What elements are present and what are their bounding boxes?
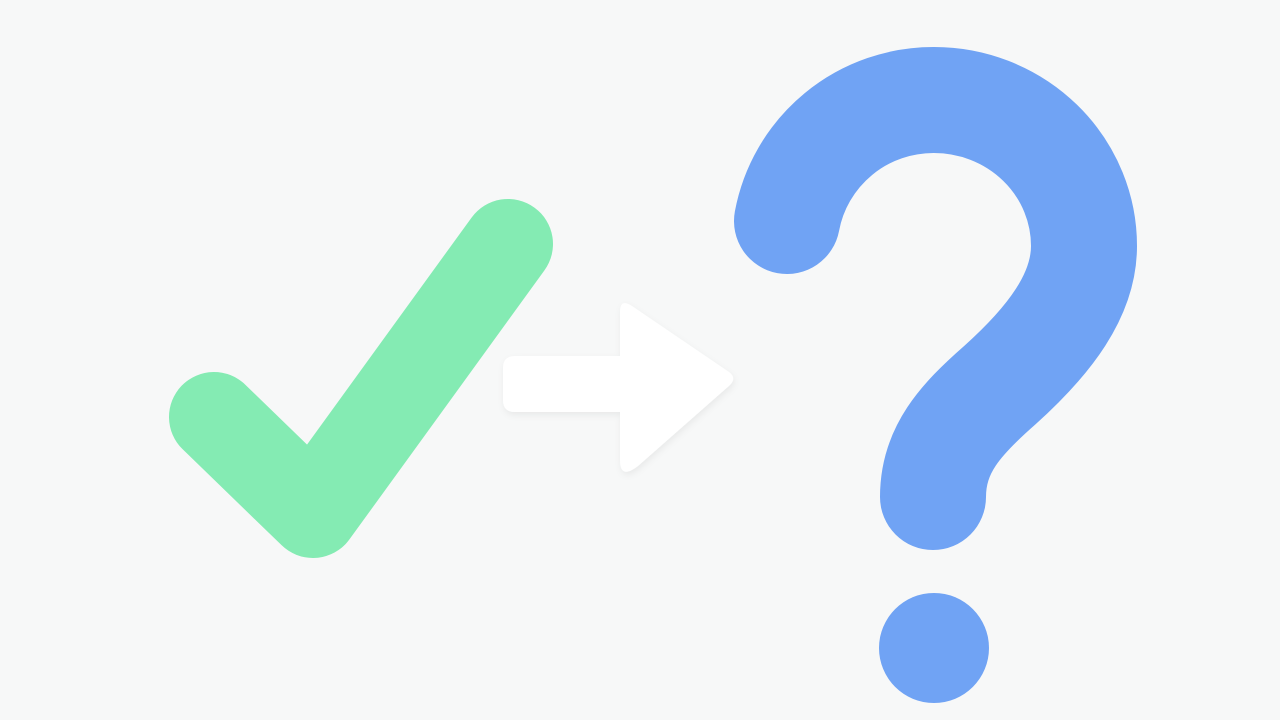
question mark hook [787, 100, 1084, 497]
question mark dot [879, 593, 989, 703]
icon: blue question mark [787, 100, 1084, 703]
arrow: white arrow pointing right [503, 303, 733, 472]
icon: green check mark [214, 244, 508, 513]
